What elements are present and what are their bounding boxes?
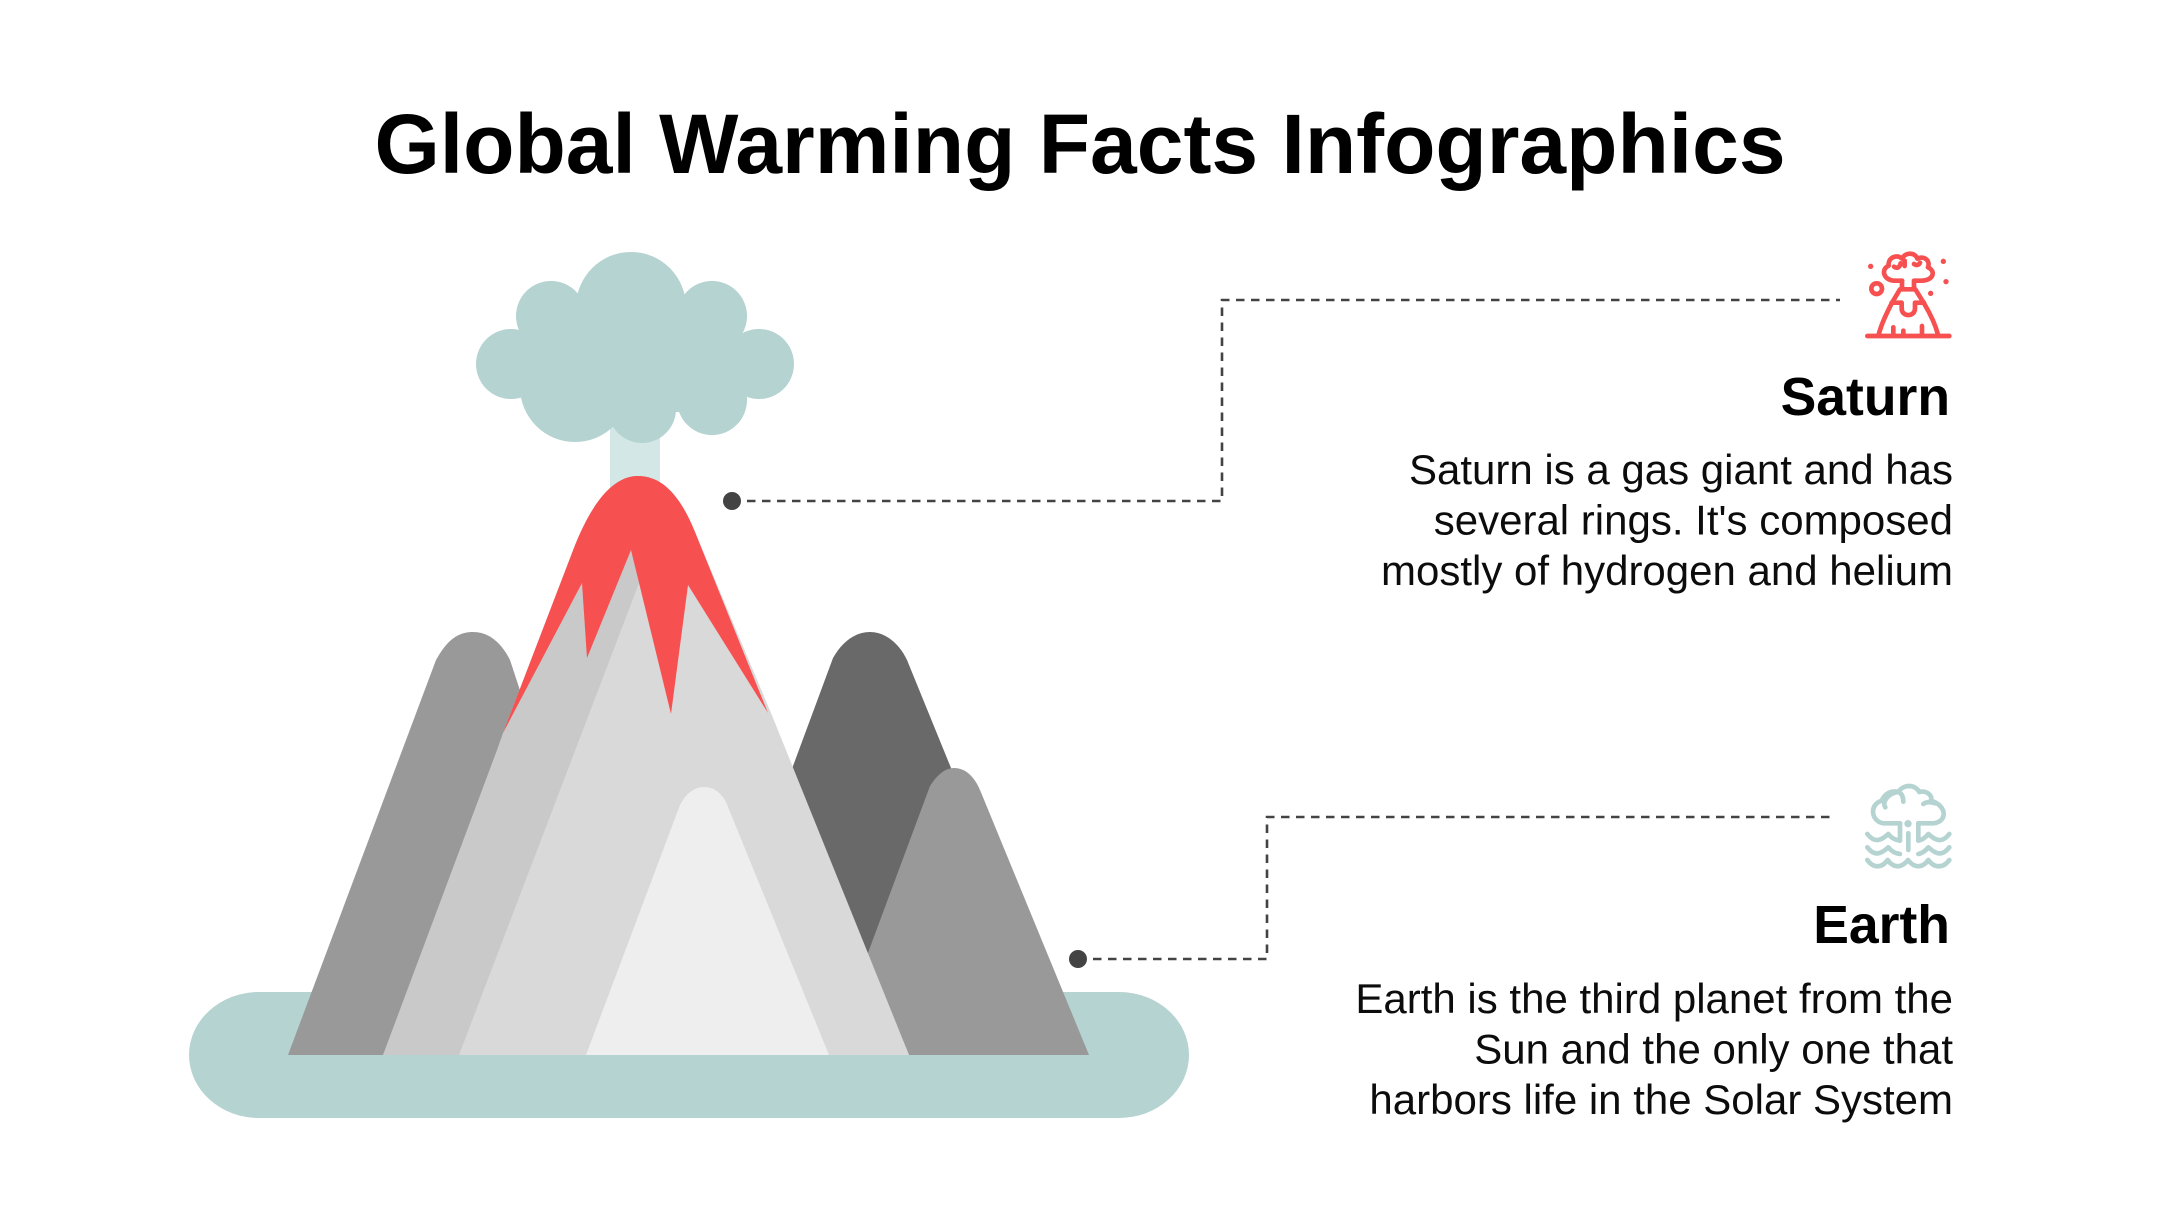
text block: Saturn: mostly of hydrogen and helium bbox=[1381, 547, 1953, 594]
text block: Saturn: Saturn is a gas giant and has bbox=[1409, 446, 1953, 493]
snow peak bbox=[586, 787, 829, 1055]
lava bbox=[503, 476, 768, 733]
dark right mountain bbox=[686, 632, 1068, 1055]
text block: Saturn bbox=[1381, 446, 1953, 594]
heading: Earth: Earth bbox=[1813, 896, 1950, 955]
text block: Earth bbox=[1355, 975, 1953, 1123]
connector: Saturn bbox=[723, 300, 1840, 510]
icon: mushroom cloud over water bbox=[1867, 786, 1949, 866]
connector: Earth bbox=[1069, 817, 1835, 968]
text block: Saturn: several rings. It's composed bbox=[1434, 496, 1953, 544]
heading: Saturn: Saturn bbox=[1781, 368, 1950, 427]
main mountain lit face bbox=[459, 532, 909, 1055]
left grey mountain bbox=[288, 632, 640, 1055]
volcano illustration bbox=[189, 252, 1189, 1118]
icon: volcano bbox=[1867, 254, 1949, 336]
text block: Earth: Sun and the only one that bbox=[1474, 1026, 1953, 1072]
main mountain bbox=[383, 476, 909, 1055]
text block: Earth: Earth is the third planet from the bbox=[1355, 975, 1953, 1022]
small right mountain bbox=[830, 768, 1089, 1055]
smoke cloud bbox=[476, 252, 794, 443]
ground bbox=[189, 992, 1189, 1118]
title: Global Warming Facts Infographics bbox=[374, 97, 1786, 191]
smoke column bbox=[610, 425, 660, 500]
text block: Earth: harbors life in the Solar System bbox=[1369, 1076, 1953, 1123]
